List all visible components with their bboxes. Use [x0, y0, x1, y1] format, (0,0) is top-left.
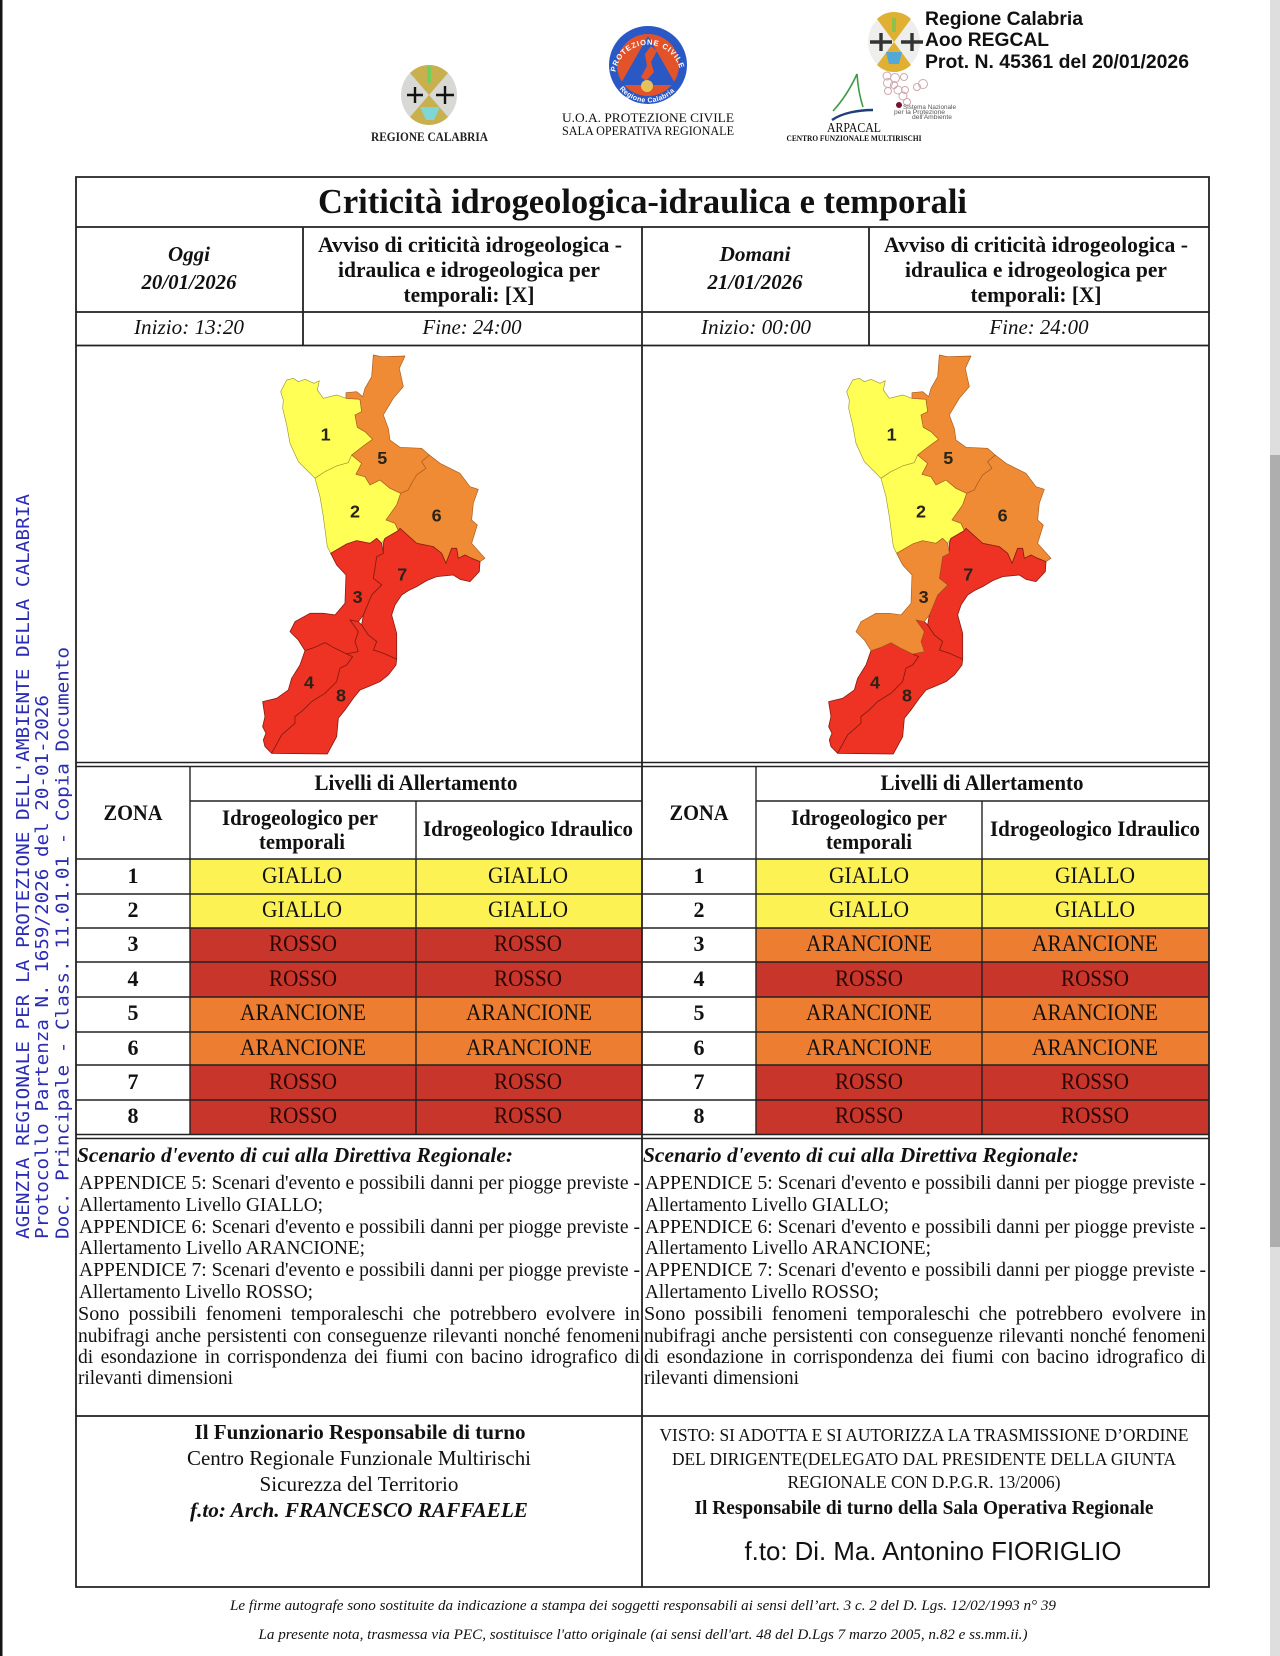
alert table header: tomorrow: Livelli di Allertamento	[880, 770, 1084, 795]
alert table rows: tomorrow: 4	[694, 966, 704, 991]
alert table rows: today: ROSSO	[494, 931, 562, 956]
alert table header: today: Idrogeologico per	[222, 805, 378, 830]
alert table header: tomorrow: Idrogeologico Idraulico	[990, 816, 1200, 841]
alert table rows: tomorrow: 1	[694, 863, 704, 888]
logo: Protezione Civile: U.O.A. PROTEZIONE CIVILE	[562, 110, 734, 125]
signature: duty officer: Il Funzionario Responsabile di turno	[194, 1420, 526, 1444]
scenario text: tomorrow: APPENDICE 5: Scenari d'evento e possibili danni per piogge previste -	[645, 1172, 1206, 1194]
alert table rows: today	[128, 863, 592, 1128]
logo: Protezione Civile	[562, 26, 734, 138]
map: tomorrow: 7	[963, 565, 973, 585]
header: tomorrow warning: idraulica e idrogeologica per	[905, 257, 1167, 282]
logo: ARPACAL: CENTRO FUNZIONALE MULTIRISCHI	[786, 133, 922, 143]
scenario text: today: Sono possibili fenomeni temporaleschi che potrebbero evolvere in	[78, 1303, 640, 1325]
logo: Protezione Civile: SALA OPERATIVA REGIONALE	[562, 123, 734, 138]
logo: ARPACAL: per la Protezione	[894, 110, 946, 116]
scenario text: tomorrow: Allertamento Livello ROSSO;	[645, 1281, 879, 1303]
time row: Fine: 24:00	[422, 315, 522, 339]
alert table rows: today: GIALLO	[488, 863, 568, 888]
alert table header: tomorrow	[670, 770, 1200, 854]
alert table rows: today: ROSSO	[494, 1103, 562, 1128]
vertical protocol stamp: AGENZIA REGIONALE PER LA PROTEZIONE DELL'AMBIENTE DELLA CALABRIA	[13, 494, 34, 1239]
alert table rows: today: ROSSO	[269, 931, 337, 956]
alert table rows: tomorrow: 5	[694, 1000, 704, 1025]
scenario text: tomorrow: nubifragi anche persistenti con conseguenze rilevanti nonché fenomeni	[644, 1325, 1206, 1347]
scenario text: tomorrow: di esondazione in corrispondenza dei fiumi con bacino idrografico di	[644, 1346, 1206, 1368]
alert table rows: today: GIALLO	[262, 897, 342, 922]
vertical protocol stamp	[13, 494, 74, 1239]
alert table rows: tomorrow: GIALLO	[1055, 897, 1135, 922]
alert table rows: today: 2	[128, 897, 138, 922]
alert table rows: tomorrow: 8	[694, 1103, 704, 1128]
time row: Inizio: 13:20	[133, 315, 244, 339]
alert table rows: tomorrow: 6	[694, 1035, 704, 1060]
header: tomorrow warning: temporali: [X]	[970, 282, 1102, 307]
map: today: 1	[321, 425, 331, 445]
header: tomorrow warning	[884, 232, 1188, 307]
header: today warning: Avviso di criticità idrogeologica -	[318, 232, 622, 257]
map: today: 3	[353, 587, 363, 607]
alert table rows: today: ROSSO	[269, 1069, 337, 1094]
signature: duty officer: f.to: Arch. FRANCESCO RAFFAELE	[190, 1498, 528, 1522]
alert table rows: tomorrow: ARANCIONE	[806, 1000, 932, 1025]
alert table rows: today: GIALLO	[262, 863, 342, 888]
scenario text: tomorrow: Sono possibili fenomeni temporaleschi che potrebbero evolvere in	[644, 1303, 1206, 1325]
signature: duty officer: Sicurezza del Territorio	[260, 1472, 458, 1496]
alert table rows: today: ARANCIONE	[466, 1035, 592, 1060]
scenario text: today: Scenario d'evento di cui alla Direttiva Regionale:	[77, 1143, 513, 1167]
alert table rows: today: 5	[128, 1000, 138, 1025]
signature: operations room: DEL DIRIGENTE(DELEGATO DAL PRESIDENTE DELLA GIUNTA	[672, 1449, 1176, 1470]
alert table header: tomorrow: Idrogeologico per	[791, 805, 947, 830]
scenario text: tomorrow: APPENDICE 6: Scenari d'evento e possibili danni per piogge previste -	[645, 1216, 1206, 1238]
logo: Protezione Civile: Regione Calabria	[620, 86, 675, 102]
header: tomorrow date: 21/01/2026	[707, 270, 803, 294]
alert table rows: tomorrow: 7	[694, 1069, 704, 1094]
footnotes	[229, 1598, 1057, 1643]
map: tomorrow: 2	[916, 501, 926, 521]
logo: Protezione Civile: PROTEZIONE CIVILE	[610, 40, 684, 72]
alert table header: today: Livelli di Allertamento	[314, 770, 518, 795]
protocol stamp emblem	[868, 12, 923, 72]
logo: ARPACAL: Sistema Nazionale	[903, 105, 957, 111]
alert table rows: today: 8	[128, 1103, 138, 1128]
alert table rows: today: ROSSO	[269, 1103, 337, 1128]
signature: duty officer	[187, 1420, 531, 1522]
scenario text: tomorrow	[643, 1143, 1206, 1389]
header: today warning	[318, 232, 622, 307]
logo: ARPACAL	[786, 72, 957, 143]
scenario text: tomorrow: Allertamento Livello GIALLO;	[645, 1194, 889, 1216]
map: today: 2	[350, 501, 360, 521]
map: tomorrow: 8	[902, 685, 912, 705]
signature: operations room: VISTO: SI ADOTTA E SI AUTORIZZA LA TRASMISSIONE D’ORDINE	[660, 1425, 1188, 1445]
header: today date: 20/01/2026	[141, 270, 237, 294]
scenario text: tomorrow: Scenario d'evento di cui alla Direttiva Regionale:	[643, 1143, 1079, 1167]
alert table rows: tomorrow: ARANCIONE	[806, 1035, 932, 1060]
logo: ARPACAL: dell'Ambiente	[912, 115, 953, 121]
alert table rows: tomorrow: ROSSO	[1061, 1069, 1129, 1094]
protocol stamp text: Prot. N. 45361 del 20/01/2026	[925, 51, 1189, 73]
alert table rows: today: ARANCIONE	[466, 1000, 592, 1025]
frame and grid lines	[76, 177, 1209, 1587]
alert table rows: tomorrow: 3	[694, 931, 704, 956]
map: tomorrow: 5	[943, 448, 953, 468]
scenario text: today: Allertamento Livello ARANCIONE;	[79, 1237, 365, 1259]
map: tomorrow: 6	[998, 505, 1008, 525]
protocol stamp text: Aoo REGCAL	[925, 29, 1049, 51]
map: tomorrow: 1	[887, 425, 897, 445]
scenario text: today: APPENDICE 7: Scenari d'evento e possibili danni per piogge previste -	[79, 1259, 640, 1281]
alert table rows: tomorrow: GIALLO	[1055, 863, 1135, 888]
alert table rows: today: ARANCIONE	[240, 1000, 366, 1025]
map: tomorrow: 3	[919, 587, 929, 607]
map: tomorrow	[829, 355, 1051, 754]
alert table header: today: temporali	[259, 829, 345, 854]
scenario text: tomorrow: rilevanti dimensioni	[644, 1367, 799, 1389]
signature: duty officer: Centro Regionale Funzionale Multirischi	[187, 1446, 531, 1470]
scenario text: today: di esondazione in corrispondenza dei fiumi con bacino idrografico di	[78, 1346, 640, 1368]
header: today date	[141, 242, 237, 294]
alert table rows: tomorrow: ROSSO	[835, 1103, 903, 1128]
alert table header: today: Idrogeologico Idraulico	[423, 816, 633, 841]
alert table header: today: ZONA	[104, 800, 163, 825]
alert table rows: today: 1	[128, 863, 138, 888]
logo: Regione Calabria: REGIONE CALABRIA	[371, 129, 489, 144]
footnotes: Le firme autografe sono sostituite da indicazione a stampa dei soggetti responsabili ai sensi dell’art. 3 c. 2 del D. Lgs. 12/02/1993 n° 39	[229, 1598, 1057, 1614]
alert table rows: today: ROSSO	[494, 1069, 562, 1094]
header: today warning: temporali: [X]	[404, 282, 534, 307]
alert table rows: tomorrow: GIALLO	[829, 863, 909, 888]
time row	[133, 315, 1089, 339]
scenario text: tomorrow: Allertamento Livello ARANCIONE;	[645, 1237, 931, 1259]
footnotes: La presente nota, trasmessa via PEC, sostituisce l'atto originale (ai sensi dell'art. 48 del D.Lgs 7 marzo 2005, n.82 e ss.mm.ii.)	[257, 1627, 1028, 1643]
alert table rows: today: ROSSO	[494, 966, 562, 991]
scenario text: tomorrow: APPENDICE 7: Scenari d'evento e possibili danni per piogge previste -	[645, 1259, 1206, 1281]
alert table rows: today: GIALLO	[488, 897, 568, 922]
scenario text: today: Allertamento Livello ROSSO;	[79, 1281, 313, 1303]
alert table rows: tomorrow: ARANCIONE	[806, 931, 932, 956]
signature: operations room: Il Responsabile di turno della Sala Operativa Regionale	[694, 1497, 1154, 1519]
alert table rows: today: 6	[128, 1035, 138, 1060]
header: today warning: idraulica e idrogeologica per	[338, 257, 600, 282]
map: today: 4	[304, 673, 314, 693]
vertical protocol stamp: Doc. Principale - Class. 11.01.01 - Copia Documento	[52, 647, 74, 1239]
time row: Inizio: 00:00	[700, 315, 811, 339]
map: today: 6	[432, 505, 442, 525]
alert table rows: tomorrow: 2	[694, 897, 704, 922]
header: tomorrow warning: Avviso di criticità idrogeologica -	[884, 232, 1188, 257]
map: today	[263, 355, 485, 754]
alert table rows: tomorrow: GIALLO	[829, 897, 909, 922]
signature: operations room	[660, 1425, 1188, 1566]
alert table rows: today: 3	[128, 931, 138, 956]
alert table rows: tomorrow: ROSSO	[1061, 1103, 1129, 1128]
alert table header: today	[104, 770, 633, 854]
alert table rows: tomorrow: ROSSO	[835, 1069, 903, 1094]
zone level cell fills: today	[190, 859, 642, 1135]
alert table header: tomorrow: ZONA	[670, 800, 729, 825]
alert table rows: today: ARANCIONE	[240, 1035, 366, 1060]
alert table header: tomorrow: temporali	[826, 829, 912, 854]
map: today: 5	[377, 448, 387, 468]
title: Criticità idrogeologica-idraulica e temporali	[318, 182, 967, 221]
map: today: 7	[397, 565, 407, 585]
protocol stamp text	[925, 8, 1189, 73]
alert table rows: tomorrow: ROSSO	[1061, 966, 1129, 991]
scenario text: today: APPENDICE 5: Scenari d'evento e possibili danni per piogge previste -	[79, 1172, 640, 1194]
vertical protocol stamp: Protocollo Partenza N. 1659/2026 del 20-01-2026	[32, 695, 53, 1239]
alert table rows: tomorrow: ARANCIONE	[1032, 1000, 1158, 1025]
logo: Regione Calabria	[371, 65, 489, 144]
alert table rows: today: 4	[128, 966, 138, 991]
header: tomorrow date	[707, 242, 803, 294]
header: tomorrow date: Domani	[718, 242, 791, 266]
map: tomorrow: 4	[870, 673, 880, 693]
alert table rows: tomorrow: ARANCIONE	[1032, 931, 1158, 956]
scenario text: today: rilevanti dimensioni	[78, 1367, 233, 1389]
signature: operations room: REGIONALE CON D.P.G.R. 13/2006)	[788, 1472, 1061, 1493]
logo: ARPACAL: ARPACAL	[827, 120, 881, 135]
header: today date: Oggi	[168, 242, 210, 266]
alert table rows: tomorrow	[694, 863, 1158, 1128]
scrollbar	[1270, 0, 1280, 1656]
scenario text: today: nubifragi anche persistenti con conseguenze rilevanti nonché fenomeni	[78, 1325, 640, 1347]
signature: operations room: f.to: Di. Ma. Antonino FIORIGLIO	[744, 1536, 1122, 1566]
scenario text: today: Allertamento Livello GIALLO;	[79, 1194, 323, 1216]
scenario text: today	[77, 1143, 640, 1389]
alert table rows: today: ROSSO	[269, 966, 337, 991]
map: today: 8	[336, 685, 346, 705]
scenario text: today: APPENDICE 6: Scenari d'evento e possibili danni per piogge previste -	[79, 1216, 640, 1238]
protocol stamp text: Regione Calabria	[925, 8, 1083, 30]
alert table rows: tomorrow: ROSSO	[835, 966, 903, 991]
zone level cell fills: tomorrow	[756, 859, 1209, 1135]
alert table rows: tomorrow: ARANCIONE	[1032, 1035, 1158, 1060]
alert table rows: today: 7	[128, 1069, 138, 1094]
time row: Fine: 24:00	[989, 315, 1089, 339]
